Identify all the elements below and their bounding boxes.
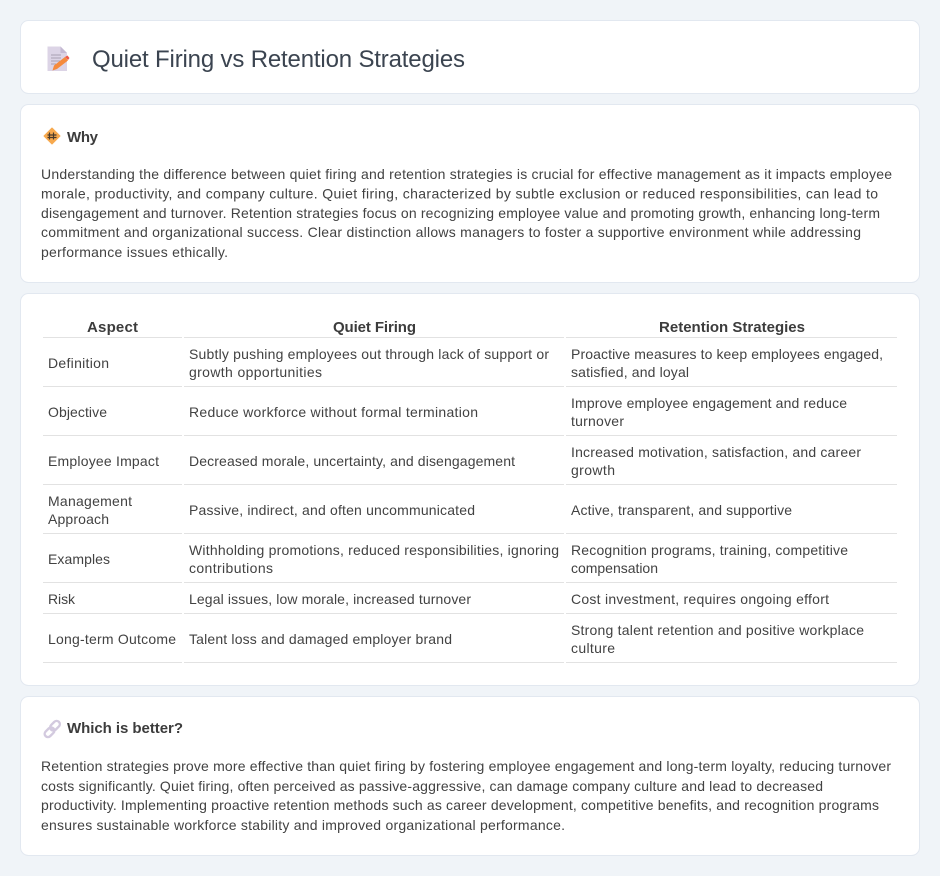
- row: risk: Risk: [48, 591, 76, 607]
- text block: which is better paragraph: Retention strategies prove more effective than quiet firing by fostering employee engagement and long-term loyalty, reducing turnover: [41, 758, 891, 774]
- row: employee impact: Decreased morale, uncertainty, and disengagement: [189, 453, 515, 469]
- row: definition: growth opportunities: [189, 364, 322, 380]
- table header row: [87, 319, 805, 336]
- panel: header: [20, 20, 920, 94]
- table header row: Quiet Firing: [333, 319, 416, 336]
- table header row: Retention Strategies: [659, 319, 805, 336]
- icon: document with pencil: [48, 46, 70, 71]
- row: employee impact: Employee Impact: [48, 453, 159, 469]
- row: objective: turnover: [571, 413, 624, 429]
- row: examples: Withholding promotions, reduced responsibilities, ignoring: [189, 542, 559, 558]
- row: definition: Definition: [48, 355, 109, 371]
- icon: orange diamond sign: [44, 128, 60, 144]
- row: management approach: Active, transparent, and supportive: [571, 502, 792, 518]
- row: long-term outcome: culture: [571, 640, 615, 656]
- text block: which is better paragraph: [41, 758, 891, 833]
- table header row: Aspect: [87, 319, 138, 336]
- row: management approach: Passive, indirect, and often uncommunicated: [189, 502, 475, 518]
- title: Quiet Firing vs Retention Strategies: [92, 46, 465, 73]
- row: risk: [48, 591, 829, 607]
- icon: chain link: [43, 720, 61, 738]
- row: definition: Subtly pushing employees out through lack of support or: [189, 346, 549, 362]
- row: examples: compensation: [571, 560, 658, 576]
- row: definition: satisfied, and loyal: [571, 364, 689, 380]
- row: definition: Proactive measures to keep employees engaged,: [571, 346, 883, 362]
- text block: which is better paragraph: ensures sustainable workforce stability and improved organizational performance.: [41, 817, 565, 833]
- row: examples: Examples: [48, 551, 110, 567]
- text block: why paragraph: [41, 166, 892, 260]
- row: employee impact: growth: [571, 462, 615, 478]
- row: objective: Reduce workforce without formal termination: [189, 404, 478, 420]
- row: risk: Legal issues, low morale, increased turnover: [189, 591, 471, 607]
- row: examples: contributions: [189, 560, 273, 576]
- text block: which is better paragraph: costs significantly. Quiet firing, often perceived as passive-aggressive, can damage company culture and lead to decreased: [41, 778, 823, 794]
- text block: why paragraph: disengagement and turnover. Retention strategies focus on recognizing employee value and promoting growth, enhancing long-term: [41, 205, 880, 221]
- row: objective: [48, 395, 847, 429]
- row: examples: Recognition programs, training, competitive: [571, 542, 848, 558]
- heading: why: Why: [67, 129, 99, 146]
- row: long-term outcome: Long-term Outcome: [48, 631, 176, 647]
- row: long-term outcome: [48, 622, 864, 656]
- row: risk: Cost investment, requires ongoing effort: [571, 591, 829, 607]
- row: definition: [48, 346, 883, 380]
- text block: why paragraph: morale, productivity, and company culture. Quiet firing, characterized by subtle exclusion or reduced responsibilities, can lead to: [41, 186, 878, 202]
- row: employee impact: [48, 444, 861, 478]
- panel: why: [20, 104, 920, 282]
- row: long-term outcome: Talent loss and damaged employer brand: [189, 631, 452, 647]
- text block: which is better paragraph: productivity. Implementing proactive retention methods such as career development, competitive benefits, and recognition programs: [41, 797, 879, 813]
- text block: why paragraph: performance issues ethically.: [41, 244, 228, 260]
- row: management approach: Management: [48, 493, 132, 509]
- row: management approach: Approach: [48, 511, 109, 527]
- row: objective: Objective: [48, 404, 107, 420]
- heading: which is better: Which is better?: [67, 720, 183, 737]
- panel: comparison table: [20, 294, 920, 686]
- row: objective: Improve employee engagement and reduce: [571, 395, 847, 411]
- row: management approach: [48, 493, 792, 527]
- row: examples: [48, 542, 848, 576]
- row: long-term outcome: Strong talent retention and positive workplace: [571, 622, 864, 638]
- row: employee impact: Increased motivation, satisfaction, and career: [571, 444, 861, 460]
- text block: why paragraph: Understanding the difference between quiet firing and retention strategies is crucial for effective management as it impacts employee: [41, 166, 892, 182]
- panel: which is better: [20, 696, 920, 856]
- text block: why paragraph: commitment and organizational success. Clear distinction allows managers to foster a supportive environment while addressing: [41, 224, 861, 240]
